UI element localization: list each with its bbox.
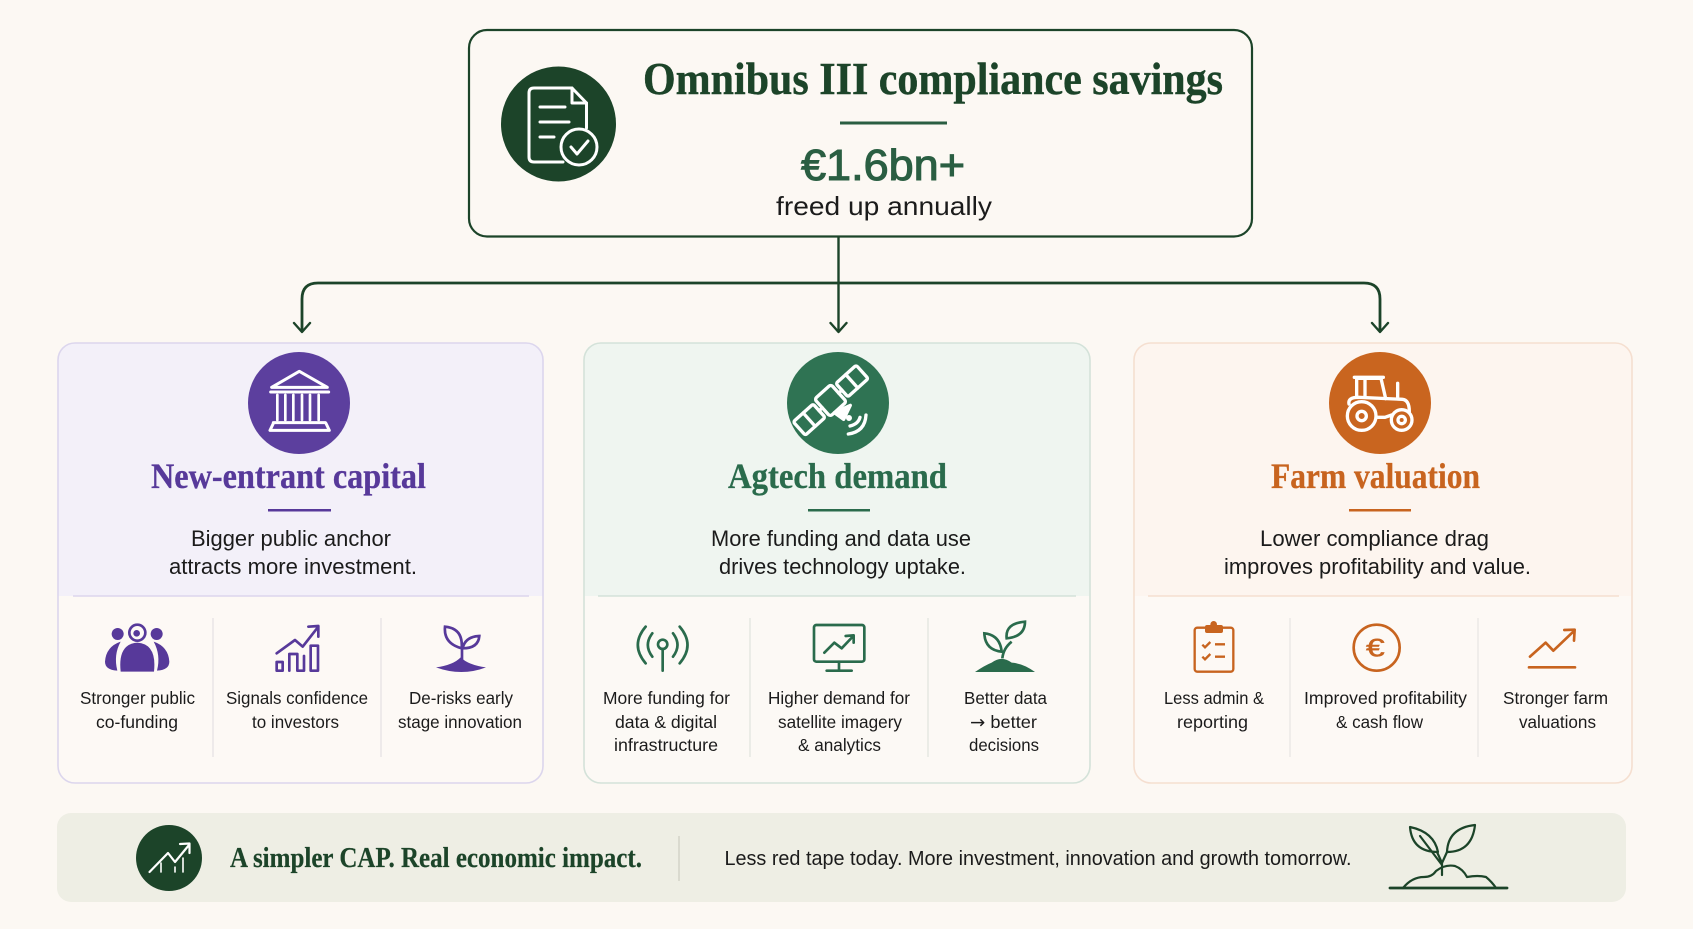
banner: bottom takeaway	[57, 813, 1626, 902]
summary text	[711, 526, 971, 579]
item labels: co-funding	[96, 712, 178, 732]
summary text: Bigger public anchor	[191, 526, 391, 551]
icon: sprout	[436, 627, 486, 672]
icon: trend line	[1529, 630, 1575, 667]
heading rule	[268, 509, 331, 512]
panel: agtech demand	[584, 343, 1090, 783]
takeaway heading: A simpler CAP. Real economic impact.	[230, 843, 642, 874]
heading: Farm valuation	[1271, 456, 1480, 496]
icon: tractor	[1329, 352, 1431, 454]
item labels: data & digital	[615, 712, 717, 732]
item labels	[1164, 688, 1608, 732]
summary text: attracts more investment.	[169, 554, 417, 579]
item labels: valuations	[1519, 712, 1596, 732]
item labels: More funding for	[603, 688, 730, 708]
icon: euro coin: €	[1366, 635, 1385, 663]
icon: satellite	[787, 352, 889, 454]
summary text	[169, 526, 417, 579]
panel: headline savings	[469, 30, 1252, 236]
icon: euro coin	[1354, 625, 1400, 671]
item labels	[80, 688, 522, 732]
item labels: Stronger public	[80, 688, 195, 708]
panel: farm valuation	[1134, 343, 1632, 783]
summary text	[1224, 526, 1531, 579]
icon: analytics monitor	[814, 625, 864, 671]
item labels: infrastructure	[614, 735, 718, 755]
icon: checklist clipboard	[1195, 621, 1233, 672]
item labels: & analytics	[798, 735, 881, 755]
heading: Agtech demand	[728, 456, 947, 496]
panel: new-entrant capital	[58, 343, 543, 783]
heading rule	[808, 509, 870, 512]
item labels: stage innovation	[398, 712, 522, 732]
summary text: improves profitability and value.	[1224, 554, 1531, 579]
heading rule	[1349, 509, 1411, 512]
item labels: → better	[970, 712, 1037, 733]
icon: growth bars	[277, 626, 318, 671]
icon: people	[105, 625, 169, 672]
connector arrows	[294, 237, 1388, 332]
icon: compliance document	[501, 66, 616, 182]
heading: New-entrant capital	[151, 456, 426, 496]
title: Omnibus III compliance savings	[643, 53, 1223, 104]
item labels: to investors	[252, 712, 339, 732]
item labels: decisions	[969, 735, 1039, 755]
item labels: Less admin &	[1164, 688, 1264, 708]
icon: antenna	[638, 627, 687, 671]
item labels: Higher demand for	[768, 688, 910, 708]
item labels: Improved profitability	[1304, 688, 1467, 708]
title rule	[840, 122, 947, 124]
icon: growth chart badge	[136, 825, 202, 891]
item labels: & cash flow	[1336, 712, 1423, 732]
icon: institution building	[248, 352, 350, 454]
item labels: Better data	[964, 688, 1047, 708]
item labels: Signals confidence	[226, 688, 368, 708]
takeaway text: Less red tape today. More investment, innovation and growth tomorrow.	[724, 848, 1352, 870]
savings figure: €1.6bn+	[801, 141, 965, 190]
savings caption: freed up annually	[776, 191, 992, 221]
summary text: drives technology uptake.	[719, 554, 966, 579]
item labels: reporting	[1177, 712, 1248, 732]
summary text: More funding and data use	[711, 526, 971, 551]
item labels	[603, 688, 1047, 755]
summary text: Lower compliance drag	[1260, 526, 1489, 551]
item labels: Stronger farm	[1503, 688, 1608, 708]
icon: seedling	[975, 622, 1035, 672]
item labels: De-risks early	[409, 688, 513, 708]
icon: sprout outline	[1390, 825, 1507, 888]
item labels: satellite imagery	[778, 712, 902, 732]
